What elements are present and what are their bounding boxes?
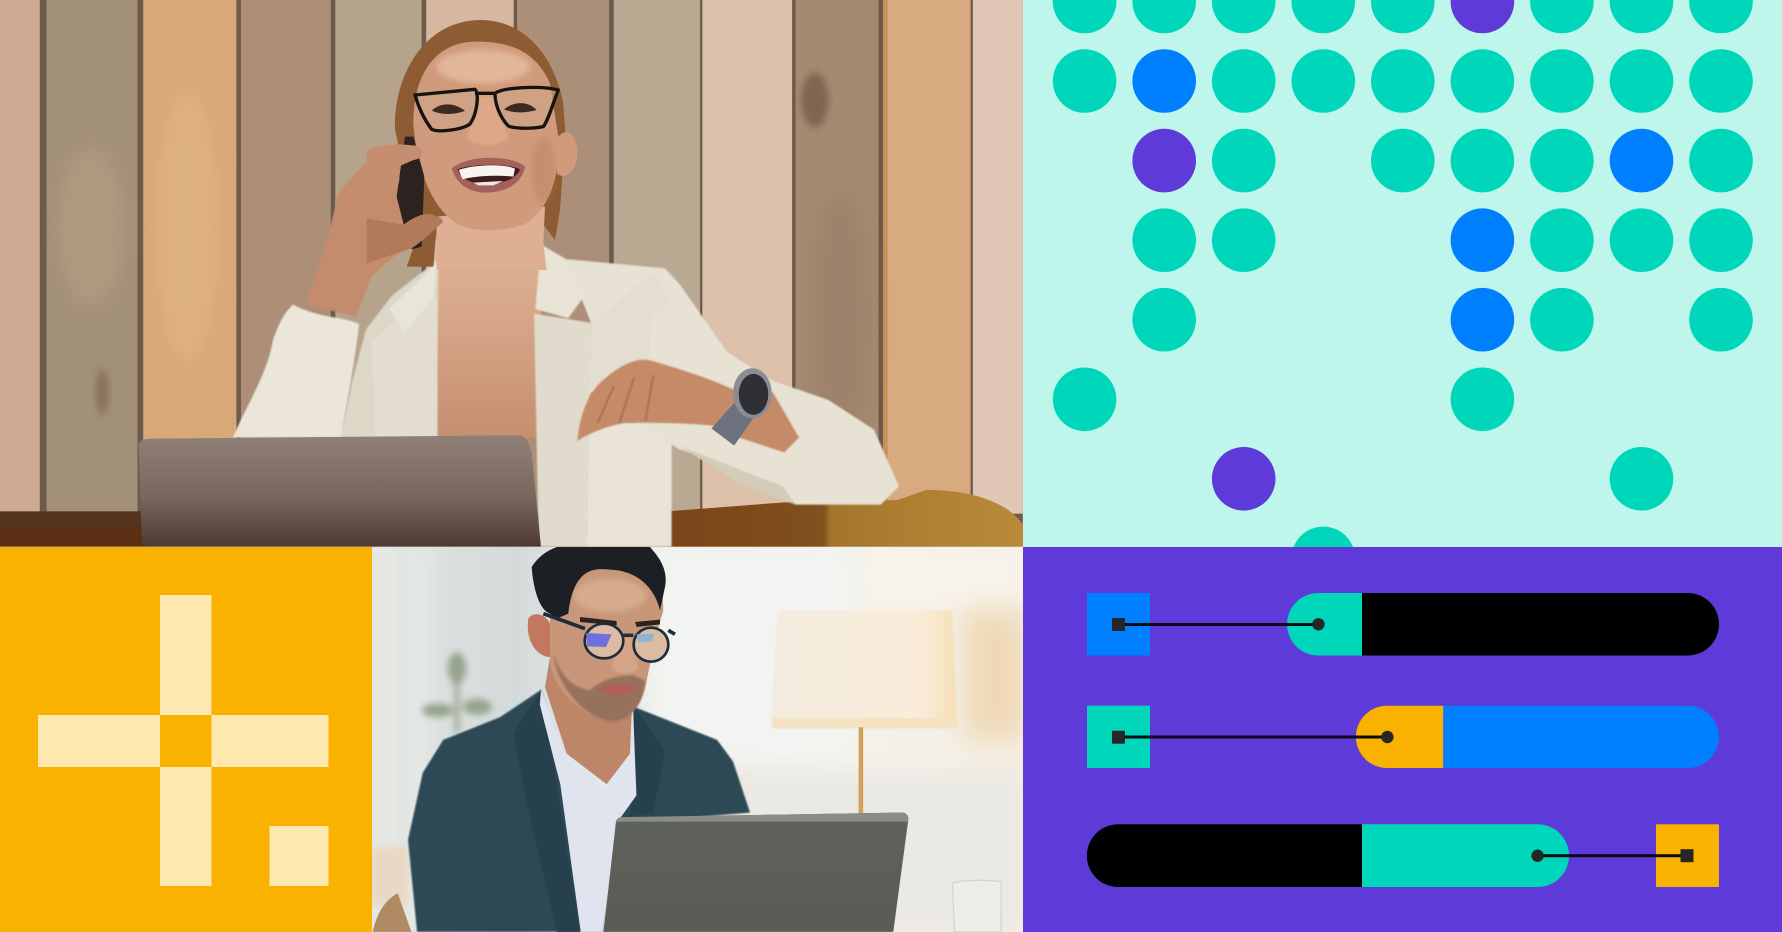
laptop	[603, 813, 908, 932]
lens reflection	[586, 633, 612, 647]
blazer	[233, 244, 899, 547]
dots row 6	[1053, 368, 1514, 431]
fingers on phone	[366, 144, 422, 184]
wood plank wall	[0, 0, 1023, 547]
plant	[422, 652, 492, 733]
toggle row 1	[1087, 593, 1719, 656]
glasses	[543, 614, 675, 662]
woman figure	[233, 143, 899, 547]
eyebrows	[580, 617, 660, 627]
eyes	[432, 104, 465, 114]
watch	[711, 368, 772, 446]
lips	[452, 158, 525, 193]
neck	[545, 657, 632, 784]
face	[550, 564, 663, 722]
nose	[467, 97, 508, 145]
nose highlight	[612, 634, 638, 673]
lips	[598, 684, 637, 695]
photo: man with glasses at laptop	[372, 543, 1025, 932]
ear	[557, 132, 577, 176]
lamp	[771, 610, 957, 814]
hair, face and glasses	[367, 20, 577, 270]
man's jacket	[408, 690, 750, 932]
hair	[395, 20, 565, 267]
shirt	[540, 690, 636, 932]
dots row 2	[1053, 49, 1753, 113]
chair	[373, 893, 411, 932]
face	[413, 42, 558, 230]
forehead highlight	[573, 579, 647, 612]
panel: mint dot grid	[1023, 0, 1782, 590]
photo: woman laughing on the phone	[0, 0, 1023, 547]
ear	[528, 614, 552, 657]
dots row 5	[1132, 288, 1753, 352]
cheek shading	[532, 138, 554, 202]
dots row 8	[1294, 526, 1353, 547]
box	[372, 847, 408, 906]
panel: yellow plus icon	[0, 547, 372, 932]
icon: pixel plus with square	[38, 595, 328, 886]
head of man	[528, 543, 675, 784]
laptop lid	[139, 435, 541, 547]
panel: purple toggles	[1023, 547, 1782, 932]
phone	[397, 137, 424, 249]
raised hand and forearm	[307, 143, 443, 317]
mouth interior	[457, 165, 520, 184]
right hand and wrist	[577, 360, 799, 452]
sofa armrest	[667, 490, 1023, 547]
beard shadow	[553, 654, 645, 722]
toggle row 3	[1087, 824, 1719, 887]
office background	[372, 547, 1025, 932]
forehead highlight	[437, 50, 530, 83]
glass	[952, 880, 1001, 932]
dots row 3	[1132, 129, 1753, 192]
dots row 1	[1053, 0, 1753, 33]
hair	[532, 543, 666, 619]
neck	[437, 207, 547, 270]
toggle row 2	[1087, 706, 1719, 768]
chest and neck	[437, 270, 541, 438]
glasses	[415, 87, 558, 131]
dots row 7	[1212, 447, 1673, 511]
teeth	[459, 165, 515, 179]
dots row 4	[1132, 208, 1753, 272]
